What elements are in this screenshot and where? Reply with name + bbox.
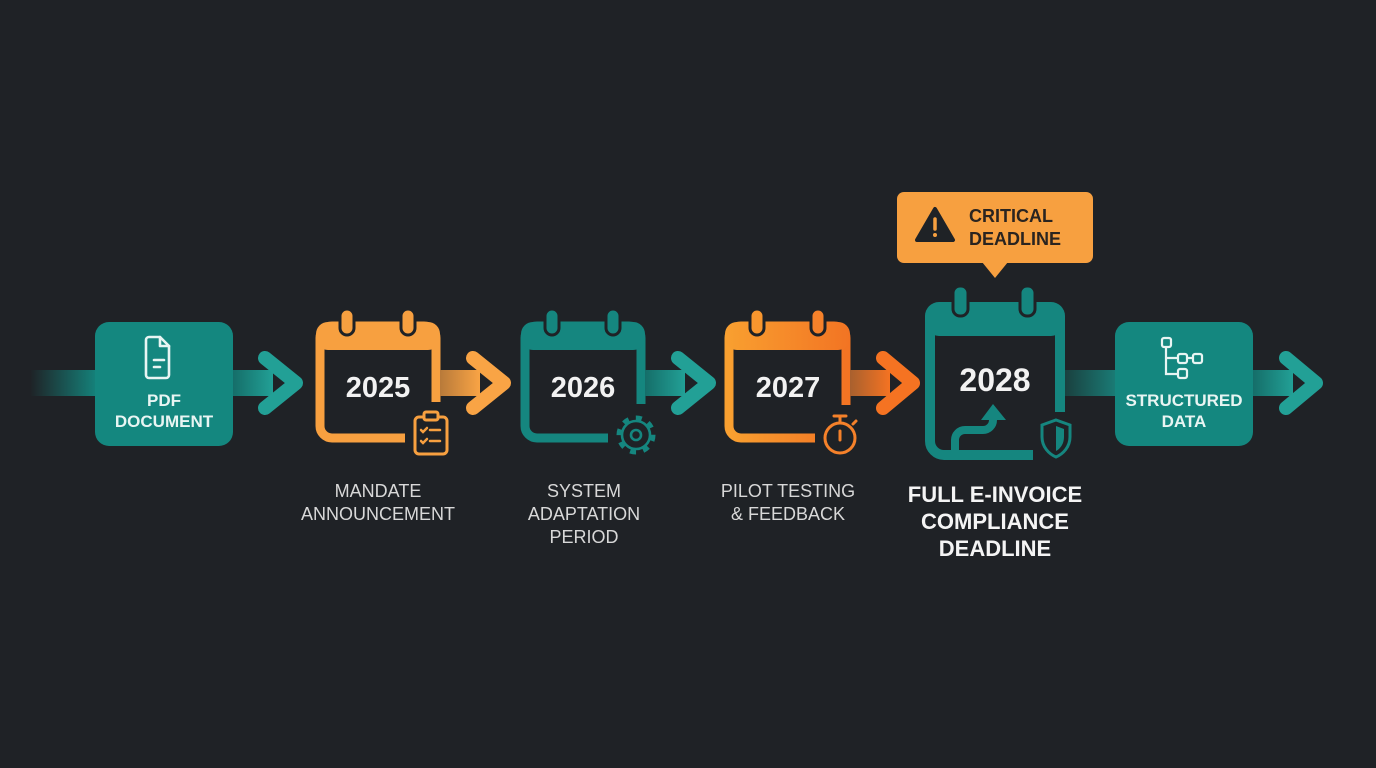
icon: document bbox=[146, 337, 169, 378]
label: full compliance deadline: FULL E-INVOICE bbox=[908, 482, 1082, 507]
calendar: 2025: 2025 bbox=[346, 372, 410, 404]
box: structured data bbox=[1115, 322, 1253, 446]
box: PDF document: PDF bbox=[147, 391, 181, 410]
arrow shaft: 2028 to structured data bbox=[1062, 370, 1118, 396]
label: pilot testing bbox=[721, 481, 855, 524]
label: full compliance deadline: COMPLIANCE bbox=[921, 509, 1069, 534]
icon: gear bbox=[608, 404, 664, 462]
box: PDF document: DOCUMENT bbox=[115, 412, 214, 431]
box: structured data: DATA bbox=[1162, 412, 1206, 431]
icon: clipboard bbox=[405, 402, 455, 460]
label: pilot testing: PILOT TESTING bbox=[721, 481, 855, 501]
calendar: 2026 bbox=[521, 309, 664, 462]
arrow: 2027 to 2028 bbox=[850, 358, 913, 408]
callout: critical deadline: CRITICAL bbox=[969, 206, 1053, 226]
lead-in fade line bbox=[30, 370, 100, 396]
arrow: 2025 to 2026 bbox=[440, 358, 504, 408]
calendar: 2028 bbox=[925, 286, 1077, 466]
calendar: 2026: 2026 bbox=[551, 372, 615, 404]
label: system adaptation period: ADAPTATION bbox=[528, 504, 640, 524]
calendar: 2027: 2027 bbox=[756, 372, 820, 404]
calendar: 2025 bbox=[316, 309, 455, 460]
arrow: output bbox=[1253, 358, 1316, 408]
label: mandate announcement bbox=[301, 481, 455, 524]
callout: critical deadline bbox=[897, 192, 1093, 278]
label: system adaptation period: PERIOD bbox=[549, 527, 619, 547]
box: structured data: STRUCTURED bbox=[1125, 391, 1243, 410]
callout: critical deadline: DEADLINE bbox=[969, 229, 1061, 249]
calendar: 2028: 2028 bbox=[959, 362, 1031, 398]
label: pilot testing: & FEEDBACK bbox=[731, 504, 845, 524]
icon: shield bbox=[1033, 412, 1077, 466]
label: system adaptation period: SYSTEM bbox=[547, 481, 621, 501]
icon: stopwatch bbox=[815, 405, 865, 460]
calendar: 2027 bbox=[725, 309, 865, 460]
arrow: PDF to 2025 bbox=[233, 358, 296, 408]
box: PDF document bbox=[95, 322, 233, 446]
label: mandate announcement: MANDATE bbox=[335, 481, 421, 501]
icon: warning bbox=[917, 209, 953, 240]
arrow: 2026 to 2027 bbox=[645, 358, 709, 408]
icon: return arrow bbox=[955, 404, 1006, 452]
label: full compliance deadline: DEADLINE bbox=[939, 536, 1051, 561]
label: system adaptation period bbox=[528, 481, 640, 547]
icon: hierarchy bbox=[1162, 338, 1202, 378]
label: full compliance deadline bbox=[908, 482, 1082, 561]
label: mandate announcement: ANNOUNCEMENT bbox=[301, 504, 455, 524]
